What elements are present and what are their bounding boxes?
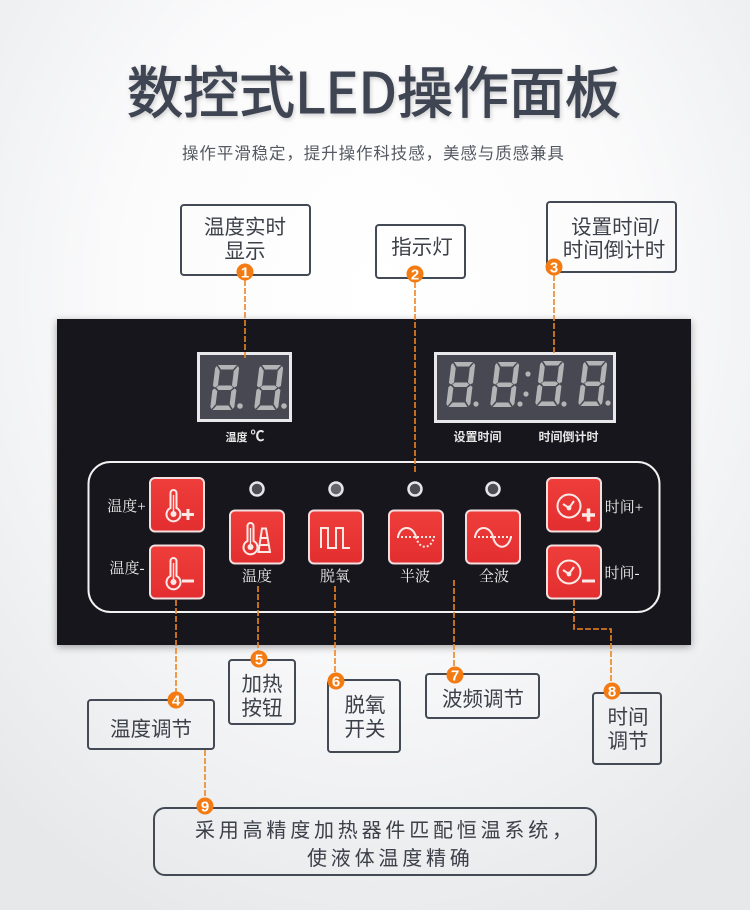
button: deoxygenation <box>309 510 363 564</box>
button: time minus <box>547 546 601 598</box>
button labels <box>107 497 643 585</box>
button labels: 全波 <box>479 568 509 585</box>
control panel <box>57 319 691 645</box>
panel: black board <box>57 319 691 645</box>
button labels: 温度+ <box>107 497 146 515</box>
callout 9: heating precision note: 使液体温度精确 <box>307 847 474 870</box>
callout 2: indicator lights <box>376 225 465 474</box>
button: temperature minus <box>150 546 204 598</box>
callout 7: wave frequency: 波频调节 <box>442 688 524 711</box>
callout 4: temperature adjust: 温度调节 <box>110 718 192 741</box>
temperature display <box>198 354 290 420</box>
button: temperature plus <box>150 478 204 532</box>
callout 9: heating precision note: 9 <box>201 798 209 816</box>
button labels: 脱氧 <box>320 568 350 585</box>
button: time plus <box>547 478 601 532</box>
callout 4: temperature adjust: 4 <box>172 692 181 710</box>
callout 3: time setting: 时间倒计时 <box>563 239 665 262</box>
button labels: 温度- <box>110 559 145 577</box>
button: heating <box>230 510 284 564</box>
time display labels <box>453 429 599 444</box>
callout 5: heating button: 5 <box>255 652 263 668</box>
time display labels: 设置时间 <box>453 430 502 444</box>
indicator lights <box>250 482 500 496</box>
callout 5: heating button <box>229 586 295 724</box>
callout 8: time adjust <box>574 600 661 764</box>
callout 8: time adjust: 调节 <box>608 730 648 753</box>
time display <box>436 354 614 422</box>
button: half wave <box>389 510 443 564</box>
callout 6: deoxygenation switch: 脱氧 <box>344 694 386 717</box>
temperature display label: 温度 ℃ <box>225 428 265 444</box>
button labels: 时间+ <box>605 499 643 516</box>
callout 6: deoxygenation switch <box>328 586 400 752</box>
time display labels: 时间倒计时 <box>538 429 599 444</box>
callout 2: indicator lights: 2 <box>411 266 419 284</box>
callout 8: time adjust: 8 <box>608 684 616 700</box>
callout 1: temperature readout <box>181 205 310 360</box>
callout 9: heating precision note: 采用高精度加热器件匹配恒温系统， <box>195 819 576 842</box>
callout 9: heating precision note <box>154 750 596 875</box>
callout 1: temperature readout: 温度实时 <box>204 216 286 239</box>
callout 2: indicator lights: 指示灯 <box>391 236 453 259</box>
callout 4: temperature adjust <box>88 600 214 749</box>
callout 5: heating button: 按钮 <box>242 697 282 720</box>
button labels: 温度 <box>242 567 272 585</box>
callout 5: heating button: 加热 <box>242 673 282 696</box>
callout 3: time setting <box>546 202 676 354</box>
callout 7: wave frequency: 7 <box>451 668 459 684</box>
callout 6: deoxygenation switch: 开关 <box>344 718 386 741</box>
callout 1: temperature readout: 1 <box>241 264 249 282</box>
subtitle: 操作平滑稳定，提升操作科技感，美感与质感兼具 <box>182 144 565 163</box>
callout 8: time adjust: 时间 <box>608 706 648 729</box>
button labels: 半波 <box>400 568 430 585</box>
button labels: 时间- <box>604 565 640 582</box>
callout 6: deoxygenation switch: 6 <box>332 674 340 690</box>
button area outline <box>88 462 660 612</box>
callout 3: time setting: 设置时间/ <box>571 216 659 239</box>
callout 7: wave frequency <box>426 580 539 718</box>
title: 数控式LED操作面板 <box>127 49 621 130</box>
callout 1: temperature readout: 显示 <box>224 240 266 263</box>
callout 3: time setting: 3 <box>550 260 558 276</box>
button: full wave <box>466 510 520 564</box>
